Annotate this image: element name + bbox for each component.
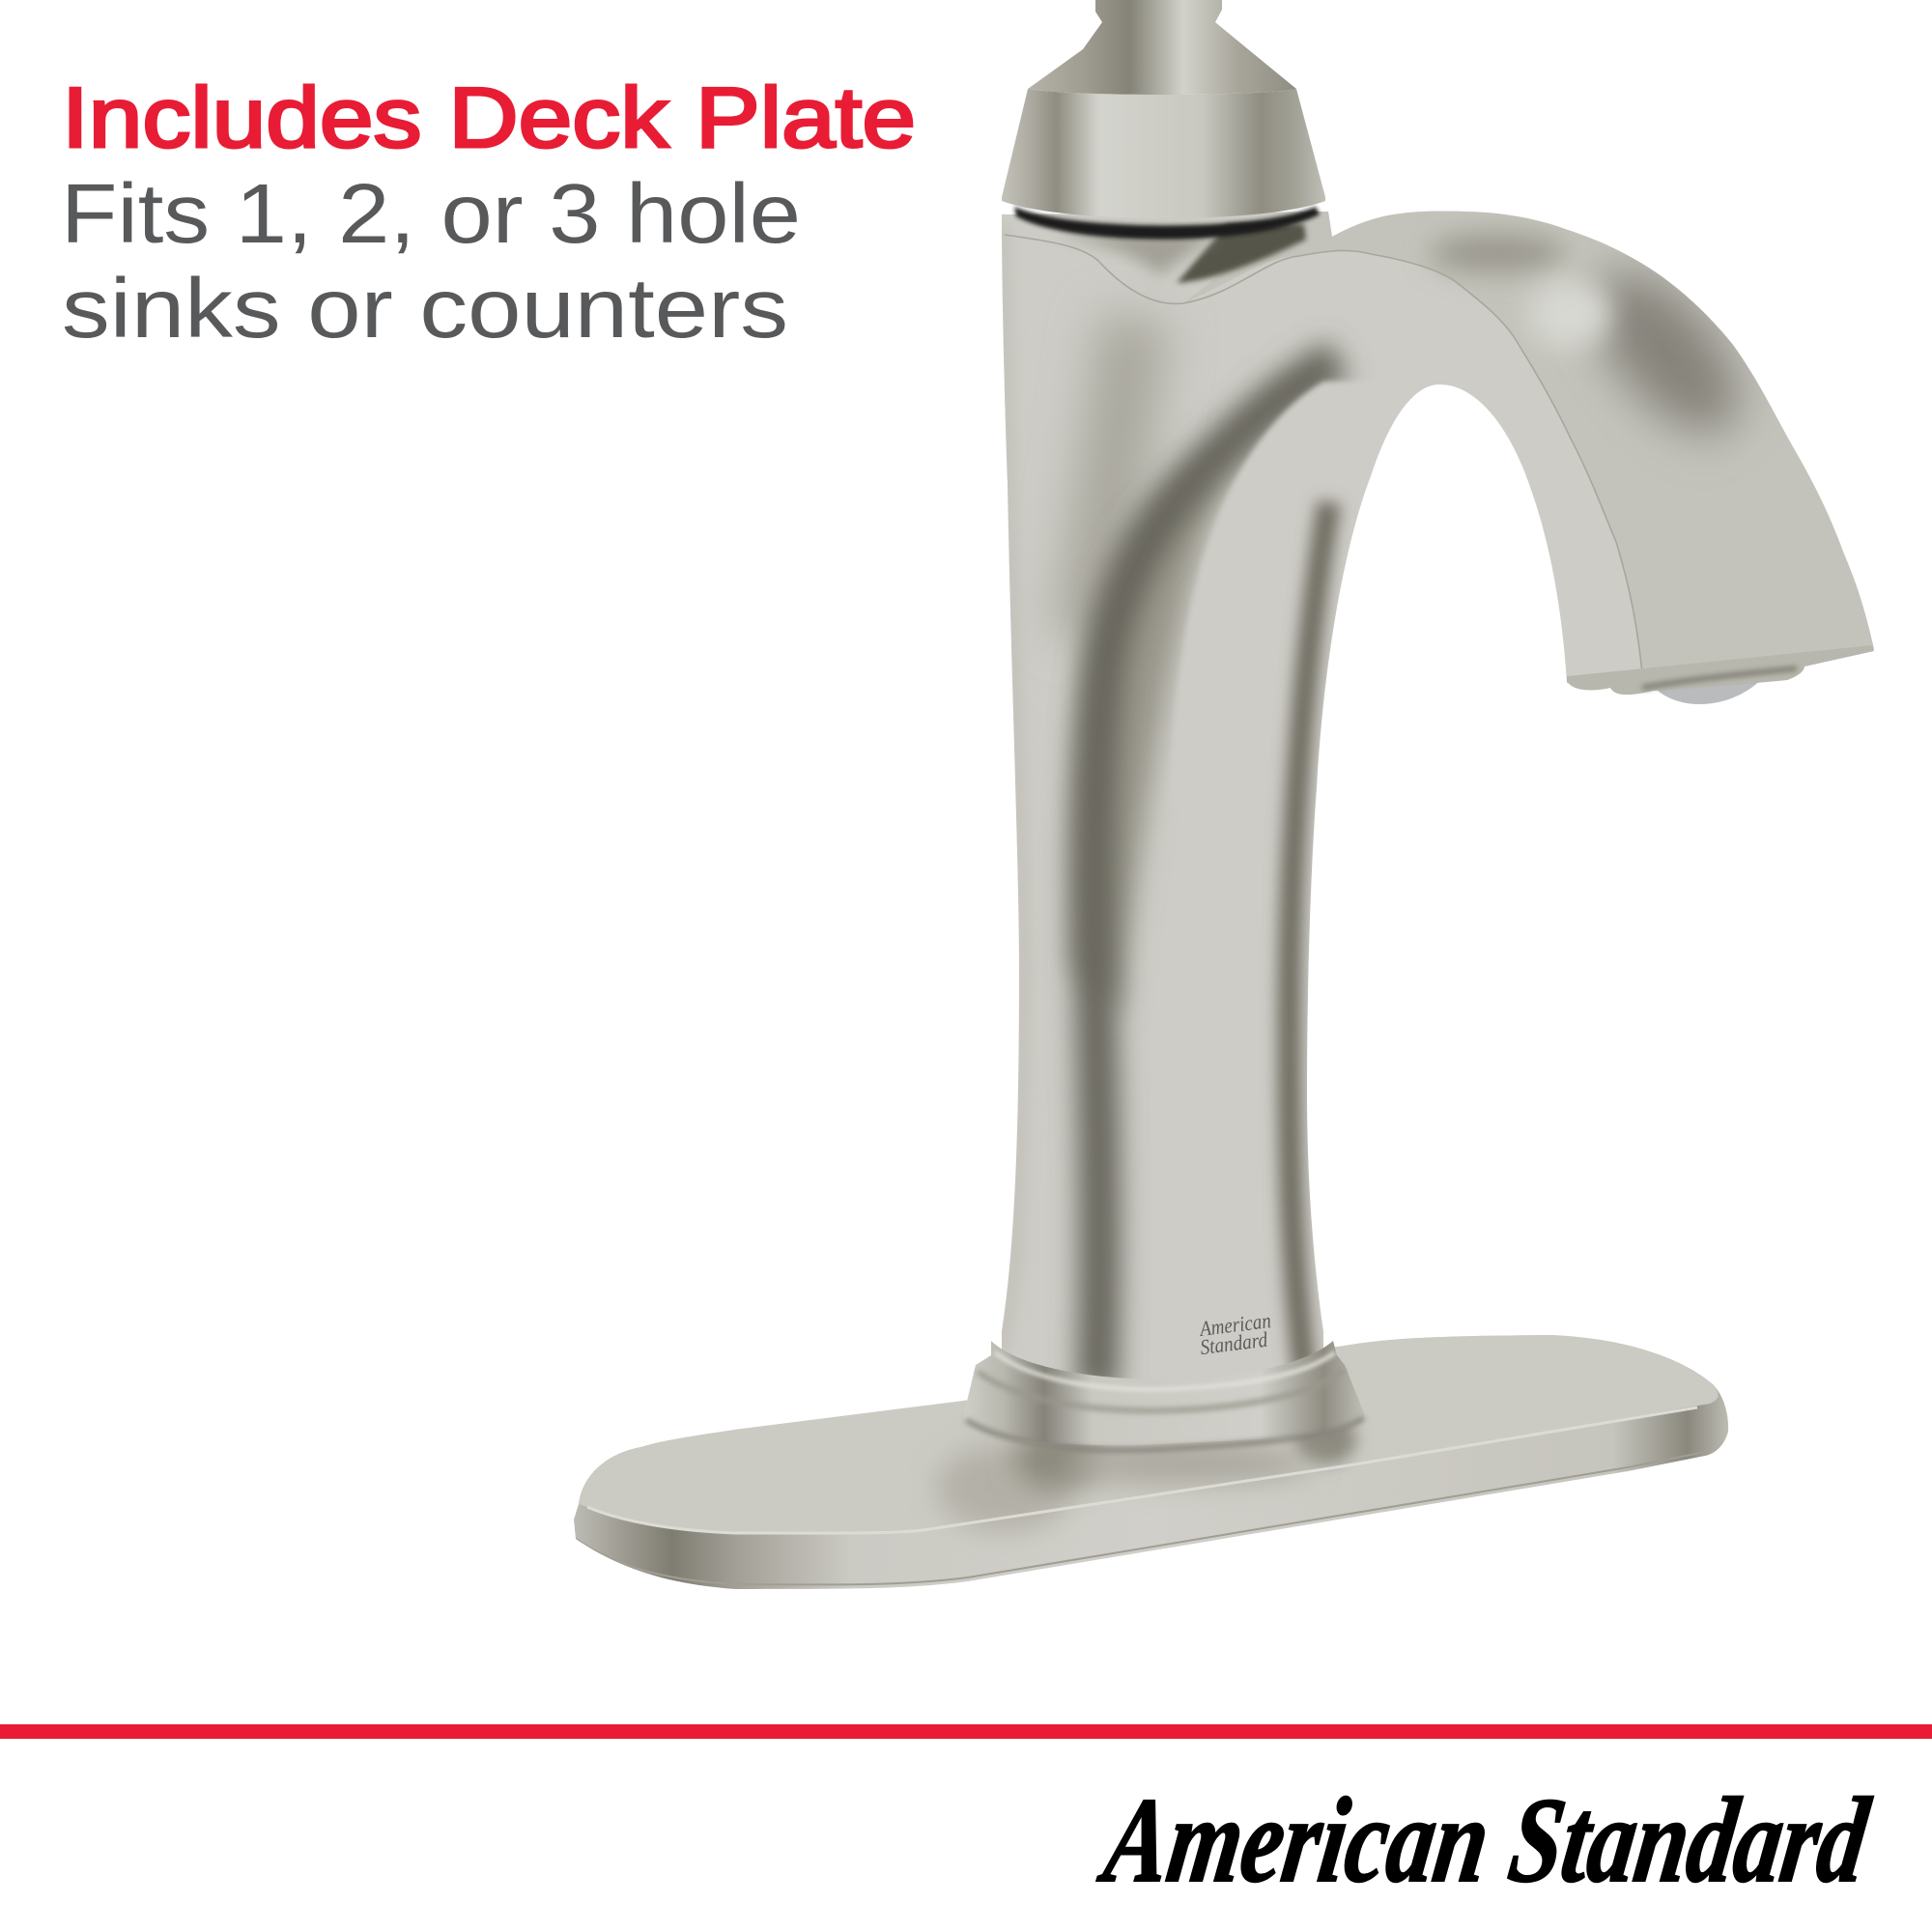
small engraved logo: American: [1197, 1308, 1272, 1341]
handle base: [1002, 89, 1325, 218]
body base: [985, 193, 1893, 1391]
spout back face: [1183, 193, 1893, 672]
small engraved logo: [1197, 1308, 1274, 1359]
inner lit surface: [1179, 379, 1417, 696]
deck plate: [574, 1335, 1728, 1589]
faucet illustration: [574, 0, 1893, 1589]
column and spout: [985, 193, 1893, 1391]
spout tip lip and aerator: [1567, 645, 1874, 704]
left edge shade: [1002, 222, 1024, 1352]
upper arch dark wash: [1057, 444, 1252, 1009]
left dark band: [1094, 359, 1338, 1391]
red divider rule: [0, 1724, 1932, 1739]
right dark band: [1290, 502, 1329, 1372]
small engraved logo: Standard: [1199, 1327, 1269, 1359]
crease line: [1005, 235, 1642, 672]
text block: fits 1, 2, or 3 hole sinks or counters: sinks or counters: [62, 262, 788, 355]
handle cone: [1028, 0, 1296, 95]
heading: Includes Deck Plate: Includes Deck Plate: [62, 70, 916, 165]
notch shadow: [1177, 224, 1306, 283]
handle shadow gap: [1014, 207, 1320, 240]
spout shading: [1430, 234, 1565, 272]
upper body wash: [1087, 319, 1135, 638]
text block: fits 1, 2, or 3 hole sinks or counters: Fits 1, 2, or 3 hole: [61, 167, 801, 261]
base collar: [964, 1341, 1364, 1450]
text block: fits 1, 2, or 3 hole sinks or counters: [61, 167, 801, 355]
